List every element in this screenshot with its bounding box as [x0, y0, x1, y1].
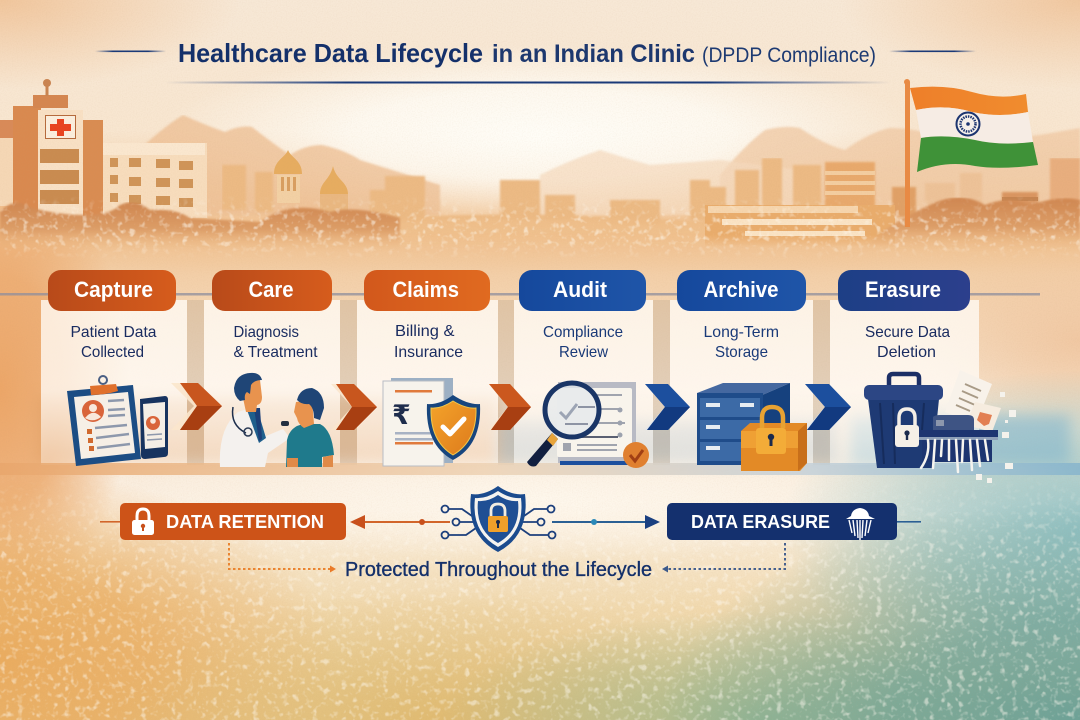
retention badge [120, 503, 346, 540]
icon: invoice with rupee and shield [383, 378, 480, 466]
description: capture [70, 324, 157, 361]
mountains [100, 115, 1080, 230]
bottom band connector: retention [100, 515, 450, 529]
city blocks [222, 158, 1080, 227]
bottom band connector: erasure [552, 515, 921, 529]
heading pill: Erasure: Erasure [865, 277, 941, 302]
heading pill: Capture [48, 270, 176, 311]
panel: erasure [830, 270, 979, 465]
decorative ground smudges behind icons [38, 396, 1070, 465]
description: claims: Billing & [395, 323, 455, 340]
icon: magnifier over checklist [527, 382, 649, 468]
arrow: capture to care [171, 383, 222, 430]
description: erasure: Deletion [877, 344, 936, 361]
title [95, 38, 976, 84]
description: archive: Long-Term [704, 324, 779, 341]
dotted connectors to caption [229, 543, 785, 572]
panel: care [204, 270, 340, 465]
hospital [0, 79, 207, 225]
description: claims: Insurance [394, 344, 463, 361]
title: Healthcare Data Lifecycle [178, 38, 483, 68]
icon: invoice with rupee and shield: ₹ [392, 400, 411, 430]
heading pill: Capture: Capture [74, 277, 153, 302]
shelf band [0, 463, 1080, 475]
background cityscape [0, 79, 1080, 252]
heading pill: Claims [364, 270, 490, 311]
panel: capture [41, 270, 187, 465]
heading pill: Claims: Claims [392, 277, 459, 302]
icon: Indian flag [904, 79, 1038, 227]
icon: doctor and patient [220, 373, 334, 467]
title: (DPDP Compliance) [702, 44, 876, 67]
lifecycle connector line [0, 293, 1040, 296]
description: archive [704, 324, 779, 361]
description: claims [394, 323, 463, 361]
description: capture: Patient Data [70, 324, 157, 341]
icon: clipboard and phone [67, 376, 168, 466]
low campus building [705, 171, 1038, 247]
icon: retention padlock [132, 509, 154, 535]
icon: locked bin and shredder [864, 370, 1016, 483]
erasure badge [667, 503, 897, 540]
icon: red cross sign [46, 116, 76, 138]
arrow: archive to erasure [805, 384, 851, 430]
erasure badge: DATA ERASURE [691, 511, 830, 532]
description: care [234, 324, 318, 361]
domes [274, 150, 348, 222]
heading pill: Audit [519, 270, 646, 311]
heading pill: Archive [677, 270, 806, 311]
description: capture: Collected [81, 344, 144, 361]
heading pill: Audit: Audit [553, 277, 608, 302]
right trees [860, 198, 1080, 252]
description: erasure: Secure Data [865, 324, 950, 341]
arrow: care to claims [331, 384, 377, 430]
heading pill: Erasure [838, 270, 970, 311]
description: audit [543, 324, 623, 361]
panel: audit [514, 270, 653, 465]
heading pill: Archive: Archive [704, 277, 778, 302]
description: care: Diagnosis [234, 324, 299, 341]
title: in an Indian Clinic [492, 40, 695, 68]
retention badge: DATA RETENTION [166, 511, 324, 532]
panel: archive [670, 270, 813, 465]
panel: claims [357, 270, 498, 465]
description: audit: Compliance [543, 324, 623, 341]
stage gap columns [187, 300, 830, 465]
description: audit: Review [559, 344, 608, 361]
icon: storage cabinet and locked briefcase [697, 383, 807, 471]
description: erasure [865, 324, 950, 361]
caption: Protected Throughout the Lifecycle [345, 559, 652, 581]
description: care: & Treatment [234, 344, 318, 361]
description: archive: Storage [715, 344, 768, 361]
heading pill: Care [212, 270, 332, 311]
heading pill: Care: Care [248, 277, 294, 302]
icon: central shield with circuits [442, 486, 556, 552]
arrow: claims to audit [489, 384, 531, 430]
trees [0, 202, 705, 252]
arrow: audit to archive [645, 384, 690, 430]
icon: erasure shredder [846, 508, 875, 540]
